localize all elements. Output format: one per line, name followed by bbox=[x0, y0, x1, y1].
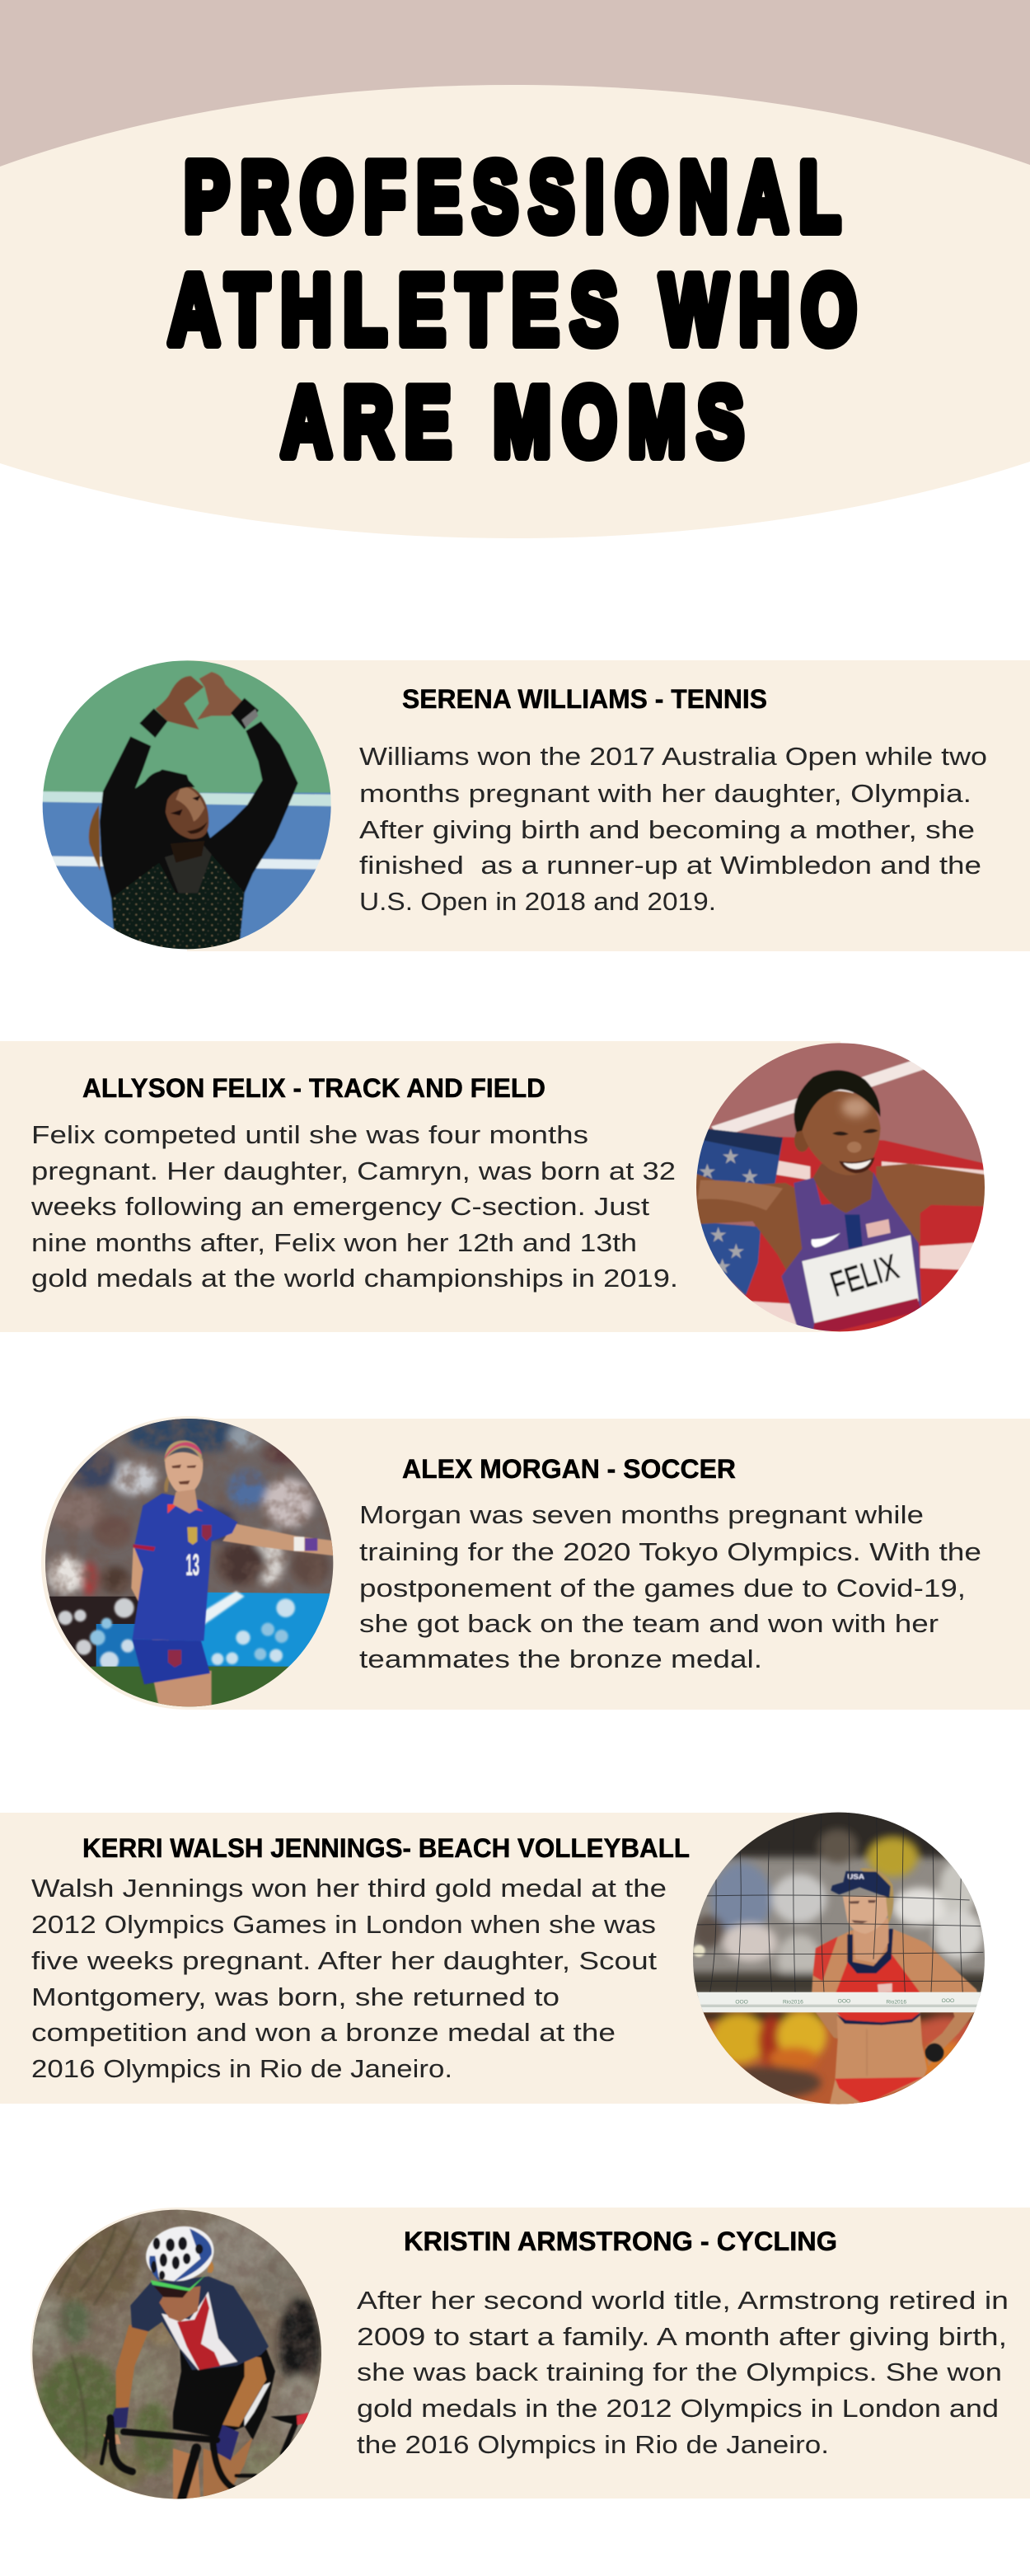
body text bbox=[359, 742, 987, 916]
net tape lettering on photo: Rio2016 bbox=[886, 2000, 906, 2006]
body text bbox=[357, 2286, 1009, 2459]
panel background bbox=[177, 2208, 1030, 2499]
body text: 2009 to start a family. A month after giving birth, bbox=[357, 2322, 1007, 2351]
net tape lettering on photo: Rio2016 bbox=[783, 2000, 803, 2006]
title bbox=[168, 142, 868, 476]
heading: ALEX MORGAN - SOCCER bbox=[402, 1454, 736, 1484]
photo: Allyson Felix with US flag bbox=[696, 1043, 985, 1332]
body text bbox=[359, 1500, 981, 1673]
body text: Montgomery, was born, she returned to bbox=[31, 1982, 559, 2011]
body text: the 2016 Olympics in Rio de Janeiro. bbox=[357, 2430, 829, 2459]
panel background bbox=[0, 1041, 840, 1332]
body text: months pregnant with her daughter, Olympia. bbox=[359, 779, 971, 808]
heading: KERRI WALSH JENNINGS- BEACH VOLLEYBALL bbox=[82, 1833, 690, 1863]
body text bbox=[31, 1874, 667, 2083]
bib name on photo: FELIX bbox=[826, 1247, 903, 1305]
cream halo behind photo bbox=[30, 2208, 322, 2499]
heading: SERENA WILLIAMS - TENNIS bbox=[402, 684, 767, 714]
body text: she got back on the team and won with her bbox=[359, 1609, 939, 1638]
panel: Allyson Felix bbox=[0, 1035, 1000, 1337]
cream halo behind photo bbox=[41, 1416, 335, 1710]
body text: training for the 2020 Tokyo Olympics. With the bbox=[359, 1537, 981, 1566]
net tape lettering on photo: OOO bbox=[735, 2000, 748, 2006]
body text: nine months after, Felix won her 12th and 13th bbox=[31, 1228, 637, 1257]
net tape lettering on photo: OOO bbox=[942, 1998, 954, 2004]
body text: 2016 Olympics in Rio de Janeiro. bbox=[31, 2054, 452, 2083]
panel: Alex Morgan bbox=[33, 1410, 1030, 1721]
body text: gold medals at the world championships in 2019. bbox=[31, 1264, 678, 1293]
body text: pregnant. Her daughter, Camryn, was born at 32 bbox=[31, 1157, 676, 1185]
panel: Kerri Walsh Jennings bbox=[0, 1805, 1000, 2121]
header: mauve band bbox=[0, 0, 1030, 264]
header: cream ellipse bbox=[0, 85, 1030, 538]
body text: teammates the bronze medal. bbox=[359, 1645, 762, 1673]
body text: finished as a runner-up at Wimbledon and the bbox=[359, 851, 981, 880]
body text: competition and won a bronze medal at the bbox=[31, 2018, 616, 2047]
visor lettering on photo: USA bbox=[847, 1872, 865, 1880]
photo: Kristin Armstrong cycling bbox=[32, 2209, 321, 2499]
photo: Alex Morgan in blue kit bbox=[45, 1419, 333, 1706]
panel: Serena Williams bbox=[33, 651, 1030, 969]
body text: After giving birth and becoming a mother, she bbox=[359, 815, 975, 844]
panel background bbox=[0, 1813, 839, 2104]
body text: postponement of the games due to Covid-19, bbox=[359, 1574, 966, 1602]
panel background bbox=[187, 660, 1030, 951]
body text: five weeks pregnant. After her daughter, Scout bbox=[31, 1946, 657, 1975]
panel background bbox=[190, 1419, 1030, 1710]
body text bbox=[30, 1120, 678, 1293]
body text: she was back training for the Olympics. She won bbox=[357, 2358, 1002, 2386]
photo: Kerri Walsh Jennings at the net bbox=[693, 1812, 985, 2104]
heading: KRISTIN ARMSTRONG - CYCLING bbox=[404, 2226, 837, 2256]
panel: Kristin Armstrong bbox=[25, 2201, 1030, 2503]
body text: After her second world title, Armstrong retired in bbox=[357, 2286, 1009, 2315]
body text: 2012 Olympics Games in London when she was bbox=[31, 1910, 656, 1939]
photo: Alex Morgan in blue kit: 13 bbox=[185, 1547, 199, 1582]
title: ARE MOMS bbox=[282, 368, 755, 476]
body text: Felix competed until she was four months bbox=[31, 1120, 588, 1149]
body text: Morgan was seven months pregnant while bbox=[359, 1500, 924, 1529]
body text: U.S. Open in 2018 and 2019. bbox=[359, 887, 716, 916]
body text: Walsh Jennings won her third gold medal at the bbox=[31, 1874, 667, 1903]
heading: ALLYSON FELIX - TRACK AND FIELD bbox=[82, 1073, 545, 1103]
net tape lettering on photo bbox=[735, 1998, 954, 2003]
body text: Williams won the 2017 Australia Open while two bbox=[359, 742, 987, 771]
body text: weeks following an emergency C-section. Just bbox=[30, 1192, 649, 1221]
net tape lettering on photo: OOO bbox=[838, 1999, 850, 2005]
photo: Serena Williams making a heart with her hands bbox=[43, 660, 331, 950]
body text: gold medals in the 2012 Olympics in London and bbox=[357, 2394, 999, 2423]
